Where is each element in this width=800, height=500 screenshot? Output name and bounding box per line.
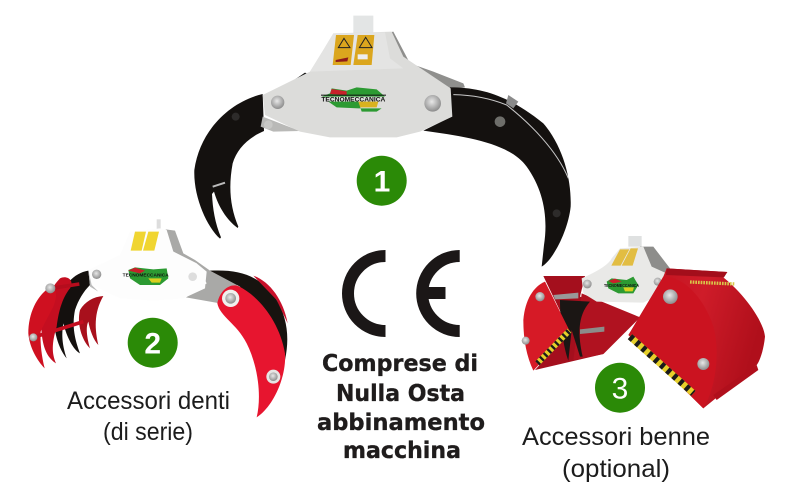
- logo: TECNOMECCANICA: [123, 273, 169, 279]
- lower link: [261, 117, 300, 132]
- text: bucket accessories: [522, 423, 710, 483]
- right bucket: [628, 268, 765, 408]
- text: certification note: Comprese di: [322, 351, 478, 377]
- teeth: [79, 296, 103, 348]
- badge 2: 2: [144, 328, 161, 360]
- text: teeth accessories: [67, 387, 230, 446]
- left side plate: [523, 282, 570, 371]
- text: teeth accessories: Accessori denti: [67, 387, 230, 415]
- red plate: [217, 285, 285, 417]
- safety stickers: [333, 35, 354, 65]
- text: certification note: [317, 351, 485, 464]
- badge 1: [357, 156, 407, 206]
- badge 3: 3: [612, 372, 628, 406]
- illustration: main grapple: [194, 16, 571, 267]
- text: certification note: abbinamento: [317, 410, 485, 436]
- logo: [321, 87, 386, 112]
- logo: [123, 267, 169, 285]
- CE mark: [348, 256, 460, 331]
- text: certification note: Nulla Osta: [336, 381, 465, 407]
- text: bucket accessories: (optional): [562, 455, 670, 483]
- bolts: [271, 96, 284, 109]
- logo: TECNOMECCANICA: [604, 283, 640, 288]
- illustration: grapple with teeth: [28, 219, 288, 417]
- badge 3: [595, 363, 645, 413]
- body: [157, 219, 161, 230]
- left arm: [194, 94, 264, 239]
- illustration: grapple with buckets: [522, 236, 765, 408]
- badge 1: 1: [374, 166, 390, 198]
- frame: [628, 236, 642, 247]
- badge 2: [128, 318, 178, 368]
- logo: [604, 277, 640, 293]
- text: teeth accessories: (di serie): [103, 418, 193, 446]
- text: certification note: macchina: [343, 438, 461, 464]
- logo: TECNOMECCANICA: [321, 98, 386, 104]
- right arm: [423, 87, 571, 267]
- body: [263, 32, 452, 137]
- text: bucket accessories: Accessori benne: [522, 423, 710, 451]
